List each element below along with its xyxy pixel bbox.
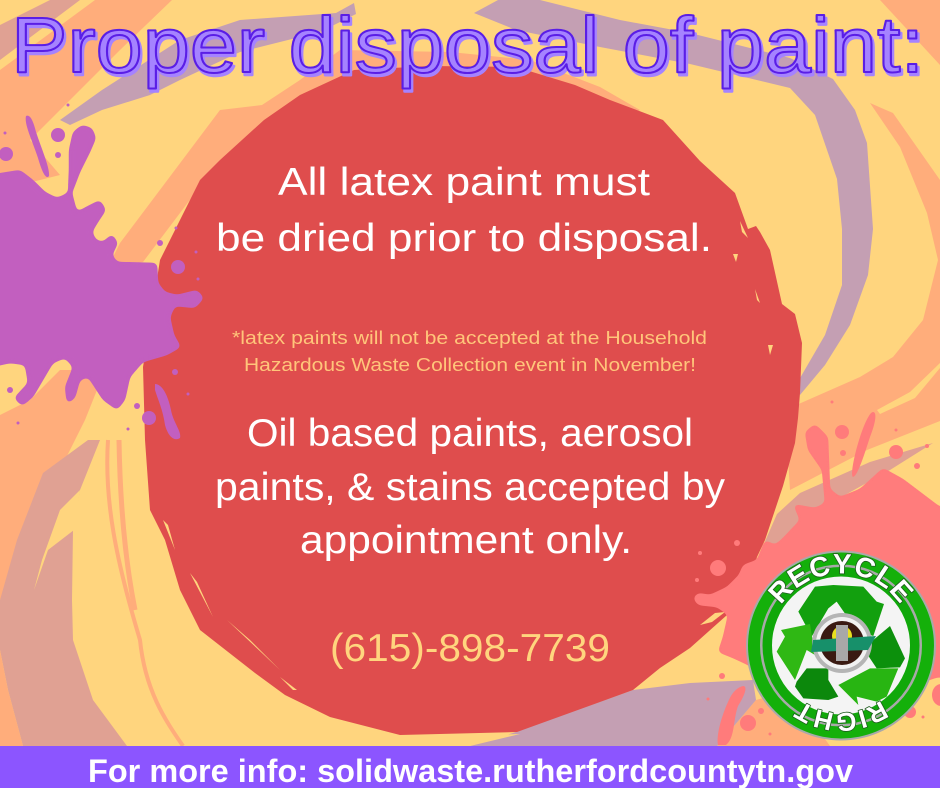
- badge lettering: RECYCLE: [766, 553, 915, 604]
- main message: latex paint: [216, 161, 712, 260]
- red paint circle: [143, 66, 802, 735]
- main message: oil based paints: [215, 412, 726, 562]
- phone number: (615)-898-7739: [330, 627, 610, 670]
- flecks in red circle: [163, 221, 773, 690]
- badge lettering: [766, 553, 915, 732]
- coral paint splat with drops: [693, 400, 940, 745]
- main message: latex paint: All latex paint must: [278, 161, 650, 204]
- latex note: Hazardous Waste Collection event in November!: [244, 354, 696, 375]
- title: Proper disposal of paint:: [11, 0, 924, 89]
- main message: latex paint: be dried prior to disposal.: [216, 217, 712, 260]
- latex note: [232, 327, 707, 375]
- main message: oil based paints: appointment only.: [300, 519, 632, 562]
- title: Proper disposal of paint:: [13, 3, 926, 92]
- badge lettering: RIGHT: [792, 700, 890, 732]
- latex note: *latex paints will not be accepted at the Household: [232, 327, 707, 348]
- logo: Recycle Right badge: [746, 550, 936, 740]
- main message: oil based paints: Oil based paints, aerosol: [247, 412, 693, 455]
- icon: recycling arrows: [777, 585, 905, 705]
- purple paint splat with drops: [0, 104, 204, 439]
- main message: oil based paints: paints, & stains accepted by: [215, 466, 726, 509]
- footer bar: For more info: solidwaste.rutherfordcountytn.gov: [88, 753, 853, 788]
- footer bar: [0, 746, 940, 788]
- icon: county seal: [811, 613, 876, 673]
